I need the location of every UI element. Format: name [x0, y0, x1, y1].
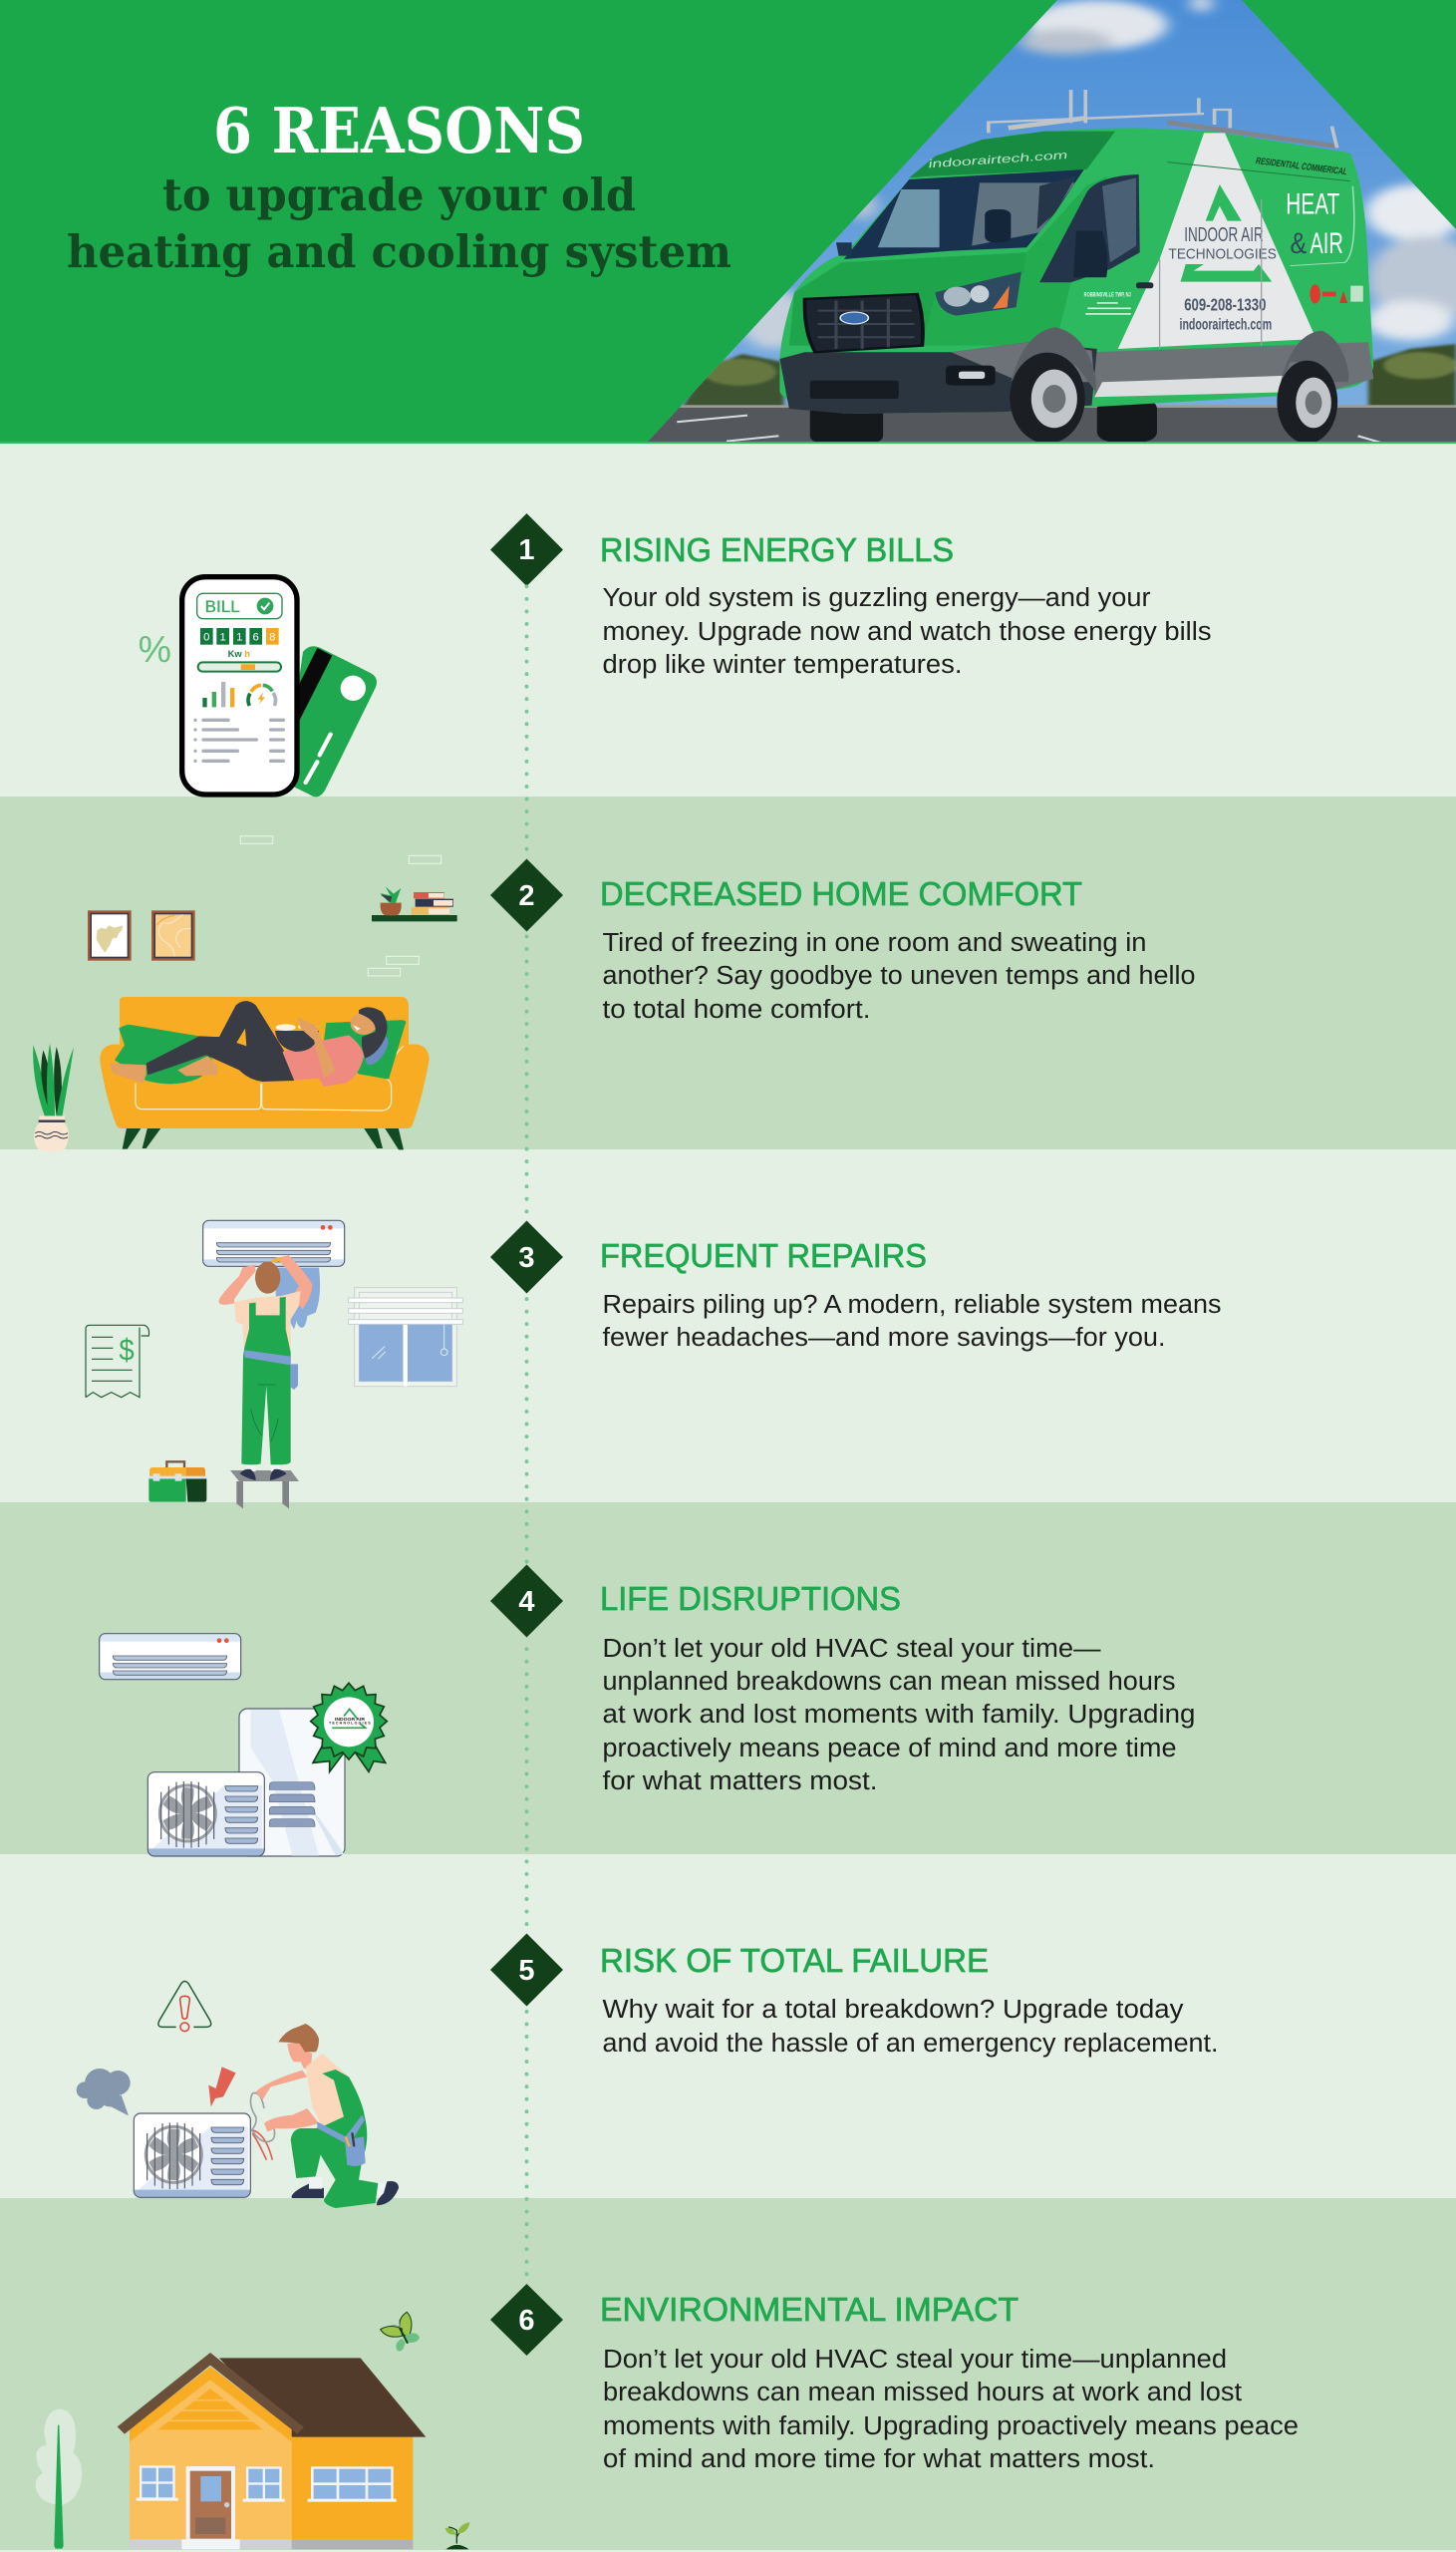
body text 3: Repairs piling up? A modern, reliable system means: [602, 1291, 1222, 1319]
body text 6: moments with family. Upgrading proactively means peace: [603, 2412, 1299, 2440]
icon: indoor AC unit: [100, 1634, 241, 1680]
illustration: house, tree and butterfly: [36, 2312, 469, 2549]
illustration: technician with failed condenser: [77, 1981, 399, 2208]
icon: sprout: [445, 2522, 469, 2549]
illustration: technician repairing AC: [86, 1220, 462, 1508]
icon: credit card: [294, 646, 377, 797]
windshield: [844, 169, 1084, 259]
icon: butterfly: [381, 2312, 420, 2351]
van photo in triangle: indoorairtech.com: [928, 149, 1068, 170]
body text 5: Why wait for a total breakdown? Upgrade today: [602, 1996, 1184, 2024]
icon: phone bill: Kw h: [228, 649, 250, 659]
number badge 1: 1: [518, 534, 535, 566]
icon: phone bill: BILL: [205, 597, 240, 616]
body text 2: to total home comfort.: [602, 996, 871, 1024]
body text 4: Don’t let your old HVAC steal your time—: [602, 1635, 1101, 1663]
icon: wall AC unit: [203, 1220, 345, 1266]
van photo in triangle: RESIDENTIAL COMMERICAL: [1255, 156, 1349, 177]
body text 6: Don’t let your old HVAC steal your time—unplanned: [603, 2346, 1227, 2374]
number badge 2: 2: [518, 880, 535, 912]
heading 1: RISING ENERGY BILLS: [600, 531, 954, 568]
subtitle line 2: heating and cooling system: [67, 225, 731, 278]
van photo in triangle: &: [1290, 226, 1307, 260]
van photo in triangle: TECHNOLOGIES: [1169, 246, 1277, 262]
number badge 3: 3: [518, 1242, 535, 1274]
heading 3: FREQUENT REPAIRS: [600, 1237, 927, 1274]
number badge 3: [490, 1220, 563, 1294]
panel: decreased home comfort: [0, 797, 1456, 1151]
icon: yellow sofa: [100, 997, 430, 1149]
icon: window with blinds: [349, 1288, 462, 1387]
icon: tall heat pump unit: [239, 1709, 345, 1856]
van photo in triangle: [638, 0, 1456, 448]
number badge 6: [490, 2284, 563, 2356]
icon: award badge: TECHNOLOGIES: [329, 1722, 371, 1726]
icon: phone bill: 8: [269, 631, 275, 643]
panel: environmental impact: [0, 2198, 1456, 2550]
icon: lightning bolt: [208, 2067, 236, 2106]
icon: phone bill: 6: [253, 631, 259, 643]
van photo in triangle: indoorairtech.com: [1179, 317, 1272, 333]
body text 3: fewer headaches—and more savings—for you.: [602, 1324, 1166, 1352]
van photo in triangle: 609-208-1330: [1184, 294, 1266, 314]
icon: award badge: INDOOR AIR: [335, 1717, 365, 1723]
body text 4: unplanned breakdowns can mean missed hours: [602, 1668, 1176, 1696]
icon: phone bill: 1: [236, 631, 242, 643]
body text 1: [602, 584, 1212, 679]
heading 6: ENVIRONMENTAL IMPACT: [600, 2291, 1019, 2328]
panel: rising energy bills: [0, 444, 1456, 797]
icon: warning triangle: [158, 1981, 211, 2032]
body text 1: money. Upgrade now and watch those energy bills: [602, 618, 1212, 646]
body text 6: breakdowns can mean missed hours at work and lost: [603, 2379, 1242, 2406]
icon: smoke cloud: [77, 2069, 131, 2115]
heading 5: RISK OF TOTAL FAILURE: [600, 1942, 989, 1979]
number badge 4: [490, 1565, 563, 1637]
body text 3: [602, 1291, 1222, 1352]
body text 2: another? Say goodbye to uneven temps and hello: [602, 962, 1196, 990]
body text 6: of mind and more time for what matters most.: [603, 2445, 1155, 2473]
panel: header: [0, 0, 1456, 448]
icon: award badge: [311, 1683, 387, 1771]
icon: house: [118, 2353, 426, 2549]
illustration: AC units and certification badge: [100, 1634, 387, 1856]
headlight: [935, 272, 1021, 316]
icon: condenser unit: [134, 2113, 250, 2197]
icon: stool: [230, 1470, 299, 1508]
icon: toolbox: [148, 1461, 206, 1502]
van photo in triangle: ROBBINSVILLE TWP, NJ: [1084, 290, 1131, 298]
panel: frequent repairs: [0, 1149, 1456, 1508]
icon: outdoor condenser unit: [147, 1772, 264, 1856]
body text 4: for what matters most.: [602, 1767, 877, 1795]
illustration: phone bill and credit card: [139, 577, 377, 797]
van photo in triangle: INDOOR AIR: [1184, 222, 1264, 246]
body text 4: at work and lost moments with family. Upgrading: [602, 1701, 1196, 1729]
dotted timeline: [525, 586, 528, 2274]
body text 5: [602, 1996, 1218, 2058]
lower body: [1092, 342, 1373, 397]
subtitle line 1: to upgrade your old: [162, 168, 636, 221]
body text 4: [602, 1635, 1196, 1795]
number badge 5: [490, 1934, 563, 2006]
icon: wires: [250, 2092, 275, 2160]
van photo in triangle: HEAT: [1286, 187, 1339, 220]
number badge 4: 4: [518, 1586, 535, 1618]
number badge 6: 6: [518, 2305, 535, 2337]
body text 1: Your old system is guzzling energy—and your: [602, 584, 1151, 612]
icon: receipt: [86, 1325, 149, 1398]
side window: [1039, 174, 1140, 282]
van photo in triangle: AIR: [1310, 226, 1343, 260]
body text 2: Tired of freezing in one room and sweating in: [602, 929, 1146, 957]
icon: percent: %: [139, 629, 171, 670]
number badge 1: [490, 513, 563, 586]
van body: [779, 128, 1373, 414]
body text 4: proactively means peace of mind and more time: [602, 1735, 1176, 1762]
number badge 2: [490, 859, 563, 931]
number badge 5: 5: [518, 1955, 535, 1987]
far wheels: [809, 411, 883, 442]
white logo panel: [1118, 133, 1316, 349]
body text 5: and avoid the hassle of an emergency replacement.: [602, 2030, 1218, 2058]
body text 2: [602, 929, 1196, 1024]
icon: phone bill: 1: [220, 631, 226, 643]
illustration: woman relaxing on sofa: [33, 836, 457, 1151]
icon: phone bill: 0: [203, 631, 209, 643]
icon: potted snake plant: [33, 1044, 74, 1151]
icon: tree: [36, 2409, 82, 2549]
heading 2: DECREASED HOME COMFORT: [600, 875, 1082, 912]
icon: receipt: $: [119, 1334, 135, 1368]
icon: cushions: [115, 1020, 406, 1084]
icon: shelf with plant and books: [372, 886, 457, 921]
icon: technician from behind: [218, 1255, 320, 1480]
panel: life disruptions: [0, 1502, 1456, 1856]
roof rack: [989, 90, 1337, 148]
icon: framed leaf picture: [88, 910, 132, 961]
title: 6 REASONS: [213, 94, 585, 167]
icon: framed abstract picture: [151, 910, 195, 961]
icon: phone bill: [182, 577, 297, 795]
body text 1: drop like winter temperatures.: [602, 651, 963, 679]
body text 6: [603, 2346, 1299, 2473]
heading 4: LIFE DISRUPTIONS: [600, 1580, 901, 1617]
icon: kneeling technician: [256, 2024, 399, 2208]
wheel arches and wheels: [1011, 327, 1096, 392]
grille: [804, 294, 923, 352]
icon: relaxing woman: [110, 1001, 388, 1087]
panel: risk of total failure: [0, 1854, 1456, 2208]
